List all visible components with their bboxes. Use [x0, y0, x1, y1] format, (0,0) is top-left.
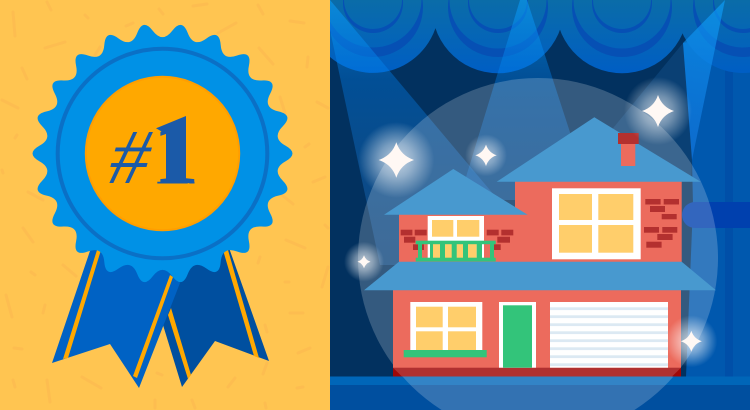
window sill: [404, 350, 487, 357]
upper large window: [552, 188, 641, 259]
bricks: upper right: [644, 199, 679, 248]
main roof: [497, 117, 701, 182]
curtain: right side: [683, 30, 750, 377]
foundation band: [393, 368, 681, 376]
confetti pattern: [2, 2, 328, 408]
chimney: [618, 133, 639, 166]
small upper window: [428, 216, 484, 258]
garage door: [550, 302, 668, 368]
orange medallion: [86, 77, 239, 230]
scallop 2: [432, 0, 564, 73]
house: [364, 117, 716, 377]
bricks: left wing: [401, 230, 513, 250]
rank label: #1: [106, 101, 199, 203]
rosette badge: [33, 25, 292, 282]
ribbon: left tail: [52, 245, 180, 388]
porch roof: [364, 262, 716, 290]
ribbon: right tail: [163, 245, 269, 387]
lower window: [410, 302, 482, 352]
scallop 3: [556, 0, 688, 73]
sparkle: top right: [624, 77, 692, 145]
glass bubble: [358, 78, 718, 410]
panel: yellow ribbon background: [0, 0, 330, 410]
sparkle: bottom right: [665, 315, 717, 367]
stage floor: [330, 376, 750, 410]
front door: [499, 302, 536, 368]
scallop 1: [330, 0, 439, 73]
rank label: #1: 1: [153, 101, 199, 203]
inner ring: [58, 49, 267, 258]
sparkle: small centre: [465, 134, 507, 176]
sparkle: small left: [344, 242, 384, 282]
scalloped rosette edge: [33, 25, 292, 282]
balcony railing: [416, 241, 496, 262]
panel: stage backdrop: [330, 0, 750, 410]
left wing wall: [399, 214, 516, 262]
curtain: top scallops: [330, 0, 750, 73]
upper wall: [515, 181, 682, 262]
curtain tie: [682, 202, 750, 228]
spotlight beams: [330, 0, 725, 265]
rank label: #1: #: [106, 113, 156, 200]
lower wall: [393, 289, 681, 368]
sparkle: large left: [358, 122, 434, 198]
left wing roof: [384, 169, 528, 215]
scallop 4: [677, 0, 750, 73]
